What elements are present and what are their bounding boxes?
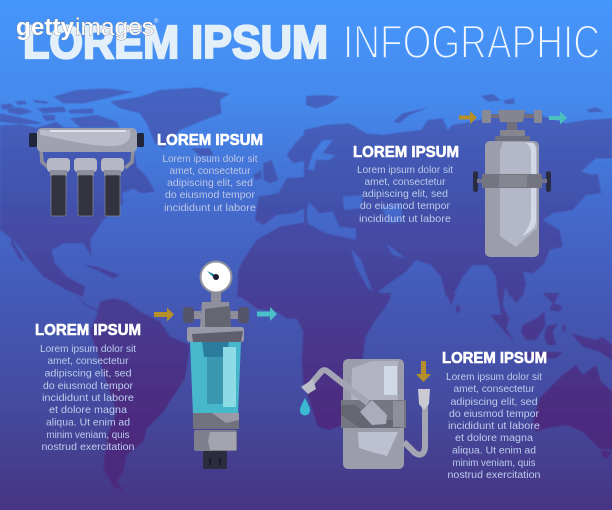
arrow: outlet top right bbox=[549, 112, 567, 124]
device: three-stage filter bbox=[29, 128, 144, 216]
text block: top right: amet, consectetur bbox=[364, 177, 446, 188]
arrow: inlet down bbox=[416, 361, 431, 382]
text block: bottom right: adipiscing elit, sed bbox=[450, 397, 538, 408]
text block: bottom right: minim veniam, quis bbox=[452, 458, 536, 469]
text block: bottom left: incididunt ut labore bbox=[42, 393, 134, 404]
text block: bottom left: do eiusmod tempor bbox=[43, 381, 134, 392]
watermark: images bbox=[75, 14, 154, 41]
title bbox=[23, 15, 600, 68]
device: cylinder tank filter bbox=[473, 110, 551, 257]
text block: top left bbox=[157, 132, 263, 214]
watermark: getty bbox=[16, 14, 75, 41]
device: under-sink faucet filter bbox=[301, 359, 430, 469]
text block: top left: adipiscing elit, sed bbox=[167, 178, 253, 189]
icon: water drop bbox=[300, 398, 310, 416]
text block: top right: do eiusmod tempor bbox=[360, 201, 451, 212]
text block: top left: do eiusmod tempor bbox=[165, 190, 256, 201]
text block: top right: LOREM IPSUM bbox=[353, 144, 459, 161]
device: pressure gauge filter bbox=[183, 262, 249, 469]
text block: bottom left: amet, consectetur bbox=[48, 356, 129, 367]
arrow: inlet centre bbox=[154, 308, 174, 322]
watermark bbox=[16, 14, 159, 41]
text block: top left: incididunt ut labore bbox=[164, 203, 256, 214]
text block: bottom right: LOREM IPSUM bbox=[442, 350, 547, 367]
text block: top left: amet, consectetur bbox=[170, 166, 251, 177]
watermark: ® bbox=[154, 18, 159, 25]
text block: bottom right: amet, consectetur bbox=[454, 384, 535, 395]
text block: bottom right: nostrud exercitation bbox=[448, 470, 541, 481]
text block: top left: LOREM IPSUM bbox=[157, 132, 263, 149]
text block: bottom left: minim veniam, quis bbox=[46, 430, 130, 441]
text block: bottom left bbox=[35, 322, 141, 453]
text block: bottom right bbox=[442, 350, 547, 481]
text block: bottom right: et dolore magna bbox=[455, 433, 533, 444]
text block: top right: adipiscing elit, sed bbox=[362, 189, 448, 200]
arrow: outlet centre bbox=[257, 307, 277, 321]
text block: bottom left: nostrud exercitation bbox=[42, 442, 135, 453]
text block: bottom left: et dolore magna bbox=[49, 405, 127, 416]
arrow: inlet top right bbox=[459, 111, 477, 124]
text block: bottom left: aliqua. Ut enim ad bbox=[46, 418, 130, 428]
text block: bottom right: Lorem ipsum dolor sit bbox=[446, 372, 542, 383]
title: LOREM IPSUM bbox=[23, 16, 328, 68]
text block: top left: Lorem ipsum dolor sit bbox=[162, 154, 258, 165]
text block: bottom left: LOREM IPSUM bbox=[35, 322, 141, 339]
text block: bottom left: Lorem ipsum dolor sit bbox=[40, 344, 136, 355]
text block: top right: Lorem ipsum dolor sit bbox=[357, 165, 453, 176]
text block: bottom right: incididunt ut labore bbox=[448, 421, 540, 432]
text block: bottom right: aliqua. Ut enim ad bbox=[452, 446, 536, 456]
text block: top right: incididunt ut labore bbox=[359, 214, 451, 225]
text block: bottom left: adipiscing elit, sed bbox=[44, 368, 132, 380]
text block: top right bbox=[353, 144, 459, 225]
text block: bottom right: do eiusmod tempor bbox=[449, 409, 540, 420]
